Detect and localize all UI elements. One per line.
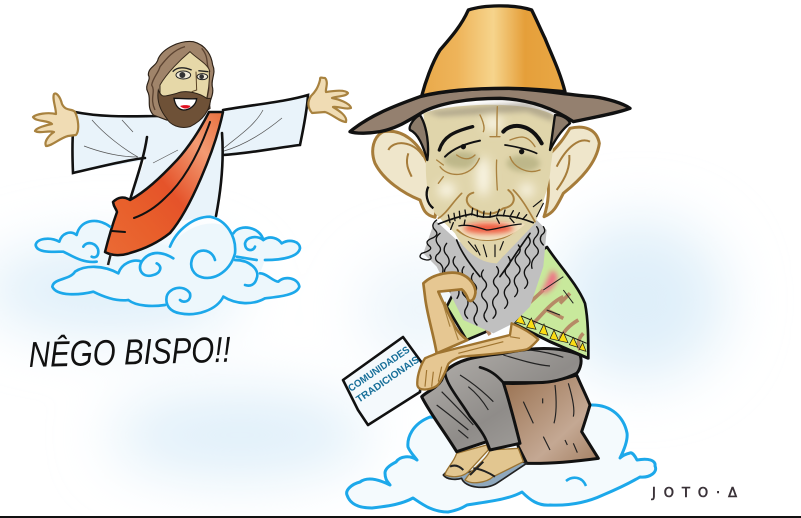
sign: comunidades tradicionais: COMUNIDADES: [346, 344, 412, 394]
right cloud: [347, 405, 656, 512]
left ear: [373, 131, 440, 217]
eyebrows and eyes: [439, 126, 542, 157]
feet and sandals: [443, 445, 527, 487]
moustache: [438, 200, 543, 277]
face highlights: [438, 117, 534, 197]
left cloud fill: [36, 221, 300, 312]
tree stump seat: [503, 375, 598, 463]
mouth: [457, 222, 525, 240]
sign: comunidades tradicionais: [343, 337, 422, 425]
sign: comunidades tradicionais: TRADICIONAIS: [354, 354, 422, 405]
seated figure: lower body: [422, 247, 598, 487]
right hand: [308, 78, 351, 122]
head: [373, 102, 599, 277]
forehead shadow: [425, 102, 553, 122]
Jesus figure: [33, 41, 351, 265]
shirt: [447, 247, 588, 358]
sash: [105, 112, 223, 255]
hat crown: [422, 6, 565, 96]
hat brim: [350, 88, 630, 133]
left cloud outline: [36, 217, 300, 314]
forearm and hand on knee: [417, 323, 538, 390]
facial lines: [437, 107, 540, 240]
eye shadows: [443, 152, 540, 172]
temple hair: [410, 115, 570, 208]
shirt sleeve triangles: [515, 315, 586, 351]
hat: [350, 6, 630, 133]
robe: [72, 95, 308, 225]
bottom border: [0, 516, 801, 518]
raised arm and hand: [423, 273, 475, 353]
beard: [420, 220, 547, 333]
head of Jesus: [147, 41, 214, 127]
left hand: [33, 93, 78, 146]
right ear: [544, 127, 599, 217]
caption: Nêgo Bispo: NÊGO BISPO!!: [28, 329, 231, 375]
trousers: [422, 349, 581, 452]
signature: Joto: JOTO·Δ: [651, 486, 737, 501]
face: [423, 105, 554, 263]
